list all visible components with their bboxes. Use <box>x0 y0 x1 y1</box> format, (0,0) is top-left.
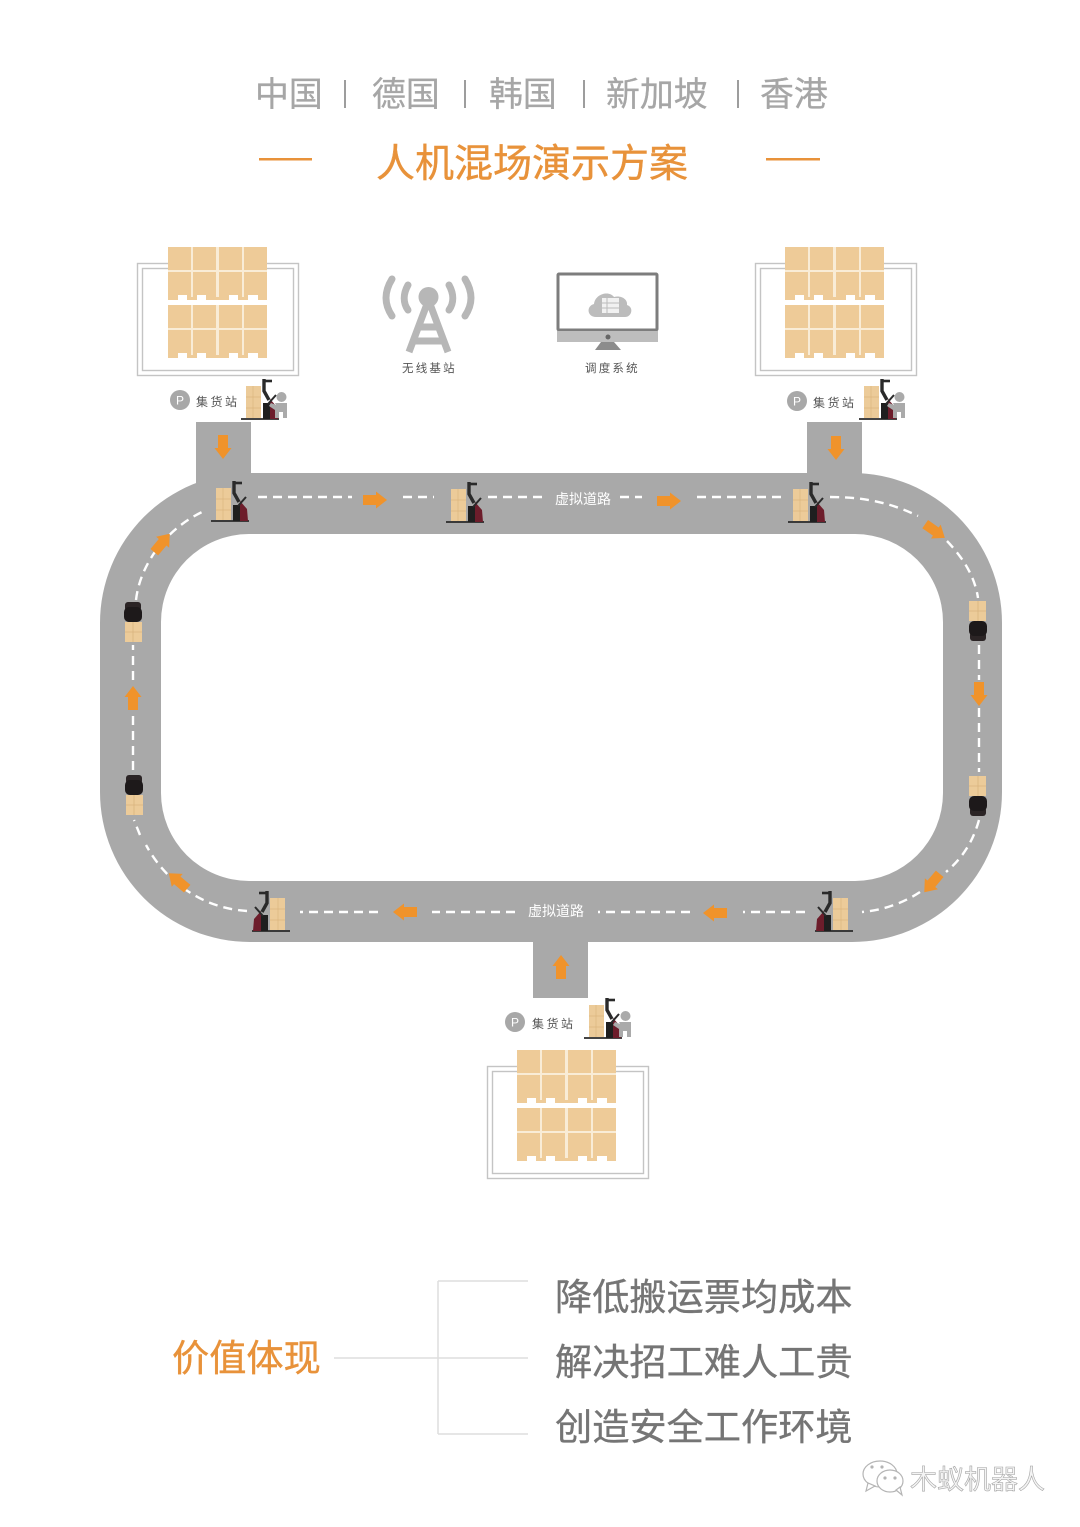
icon: wireless base station <box>386 279 471 375</box>
road loop <box>100 422 1002 998</box>
icon: wireless base station: 无线基站 <box>402 361 457 375</box>
title right rule <box>766 158 820 160</box>
header: countries: 中国 <box>255 76 323 114</box>
station: top right: P <box>793 394 801 408</box>
title: 人机混场演示方案 <box>376 143 688 186</box>
lane dashes <box>133 497 979 912</box>
station: top left: 集货站 <box>196 394 240 409</box>
station: bottom: P <box>511 1016 519 1030</box>
station: bottom: 集货站 <box>532 1016 576 1031</box>
value items: 降低搬运票均成本 <box>555 1276 853 1318</box>
header: countries: 韩国 <box>489 76 557 114</box>
station: top left: P <box>176 394 184 408</box>
watermark text: 木蚁机器人 <box>910 1465 1045 1495</box>
header: countries: 香港 <box>760 76 828 114</box>
road label: top: 虚拟道路 <box>555 491 611 507</box>
header: countries <box>255 76 828 114</box>
icon: dispatch system monitor <box>557 274 658 375</box>
watermark icon <box>863 1461 903 1495</box>
icon: dispatch system monitor: 调度系统 <box>585 361 640 375</box>
station: top right <box>756 247 916 419</box>
forklifts on road <box>124 481 987 931</box>
direction arrows <box>124 435 988 979</box>
header: countries: 新加坡 <box>606 76 708 114</box>
value items: 创造安全工作环境 <box>555 1406 853 1448</box>
title left rule <box>259 158 312 160</box>
value items <box>555 1276 853 1448</box>
station: bottom <box>488 998 648 1178</box>
road label: bottom: 虚拟道路 <box>528 903 584 919</box>
header: countries: 德国 <box>372 76 440 114</box>
station: top right: 集货站 <box>813 395 857 410</box>
station: top left <box>138 247 298 419</box>
value heading: 价值体现 <box>172 1337 321 1379</box>
value bracket lines <box>334 1281 528 1434</box>
value items: 解决招工难人工贵 <box>555 1341 853 1383</box>
